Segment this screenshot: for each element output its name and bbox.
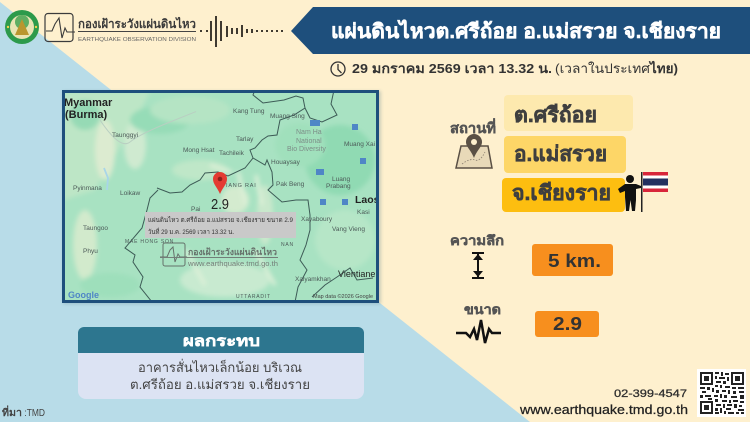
map labels: Pak Beng <box>276 181 305 188</box>
panel: impact: อาคารสั่นไหวเล็กน้อย บริเวณ <box>138 358 302 375</box>
map labels: Kang Tung <box>233 108 265 115</box>
map labels <box>73 108 375 300</box>
date and time: (เวลาในประเทศ <box>555 61 651 76</box>
icon: depth arrow <box>472 253 484 278</box>
map labels: Pai <box>191 206 200 213</box>
panel: impact <box>78 327 364 399</box>
location: province: จ.เชียงราย <box>512 181 611 205</box>
map labels: Phyu <box>83 248 98 255</box>
icon: clock <box>331 62 345 76</box>
depth value <box>532 244 613 276</box>
date and time: 29 มกราคม 2569 เวลา 13.32 น. <box>352 61 552 76</box>
map terrain: (Burma) <box>65 109 108 121</box>
map labels: Tarlay <box>236 136 254 143</box>
map labels: Muang Sing <box>270 113 305 120</box>
map labels: NAN <box>281 242 294 248</box>
map labels: Kasi <box>357 209 370 216</box>
location: subdistrict: ต.ศรีถ้อย <box>514 103 597 127</box>
panel: map <box>62 90 381 304</box>
logo: earthquake observation division: กองเฝ้าระวังแผ่นดินไหว <box>78 16 196 31</box>
icon: seismic wave <box>456 320 501 343</box>
panel: impact: ต.ศรีถ้อย อ.แม่สรวย จ.เชียงราย <box>130 377 310 392</box>
map labels: Taunggyi <box>112 132 138 139</box>
contact website: www.earthquake.tmd.go.th <box>519 402 688 417</box>
QR code <box>697 369 746 417</box>
depth value: 5 km. <box>548 251 601 271</box>
map terrain: Myanmar <box>64 97 113 109</box>
map labels: Pyinmana <box>73 185 102 192</box>
map terrain: Map data ©2026 Google <box>313 293 373 300</box>
location: subdistrict <box>504 95 633 131</box>
logo: earthquake observation division <box>45 14 196 43</box>
map watermark <box>160 243 278 268</box>
map marker: 2.9 <box>211 196 229 213</box>
map terrain: Laos <box>355 194 380 206</box>
title banner <box>291 7 750 54</box>
map labels: MAE HONG SON <box>125 239 174 245</box>
map labels: IANG RAI <box>226 183 257 189</box>
title banner: แผ่นดินไหวต.ศรีถ้อย อ.แม่สรวย จ.เชียงราย <box>331 19 721 43</box>
location: district <box>504 136 626 173</box>
icon: sound wave bars <box>200 16 283 47</box>
map credits: Google <box>68 290 99 300</box>
map labels: UTTARADIT <box>236 294 271 300</box>
map labels: Mong Hsat <box>183 147 215 154</box>
date and time: ไทย) <box>648 60 678 76</box>
map labels: Luang <box>332 176 350 183</box>
map water <box>104 168 108 190</box>
map caption box: วันที่ 29 ม.ค. 2569 เวลา 13.32 น. <box>148 227 234 236</box>
magnitude value <box>535 311 599 337</box>
source note: :TMD <box>22 408 45 419</box>
location label: สถานที่ <box>450 118 496 136</box>
map marker <box>212 172 228 209</box>
map terrain: Vientiane <box>338 269 375 279</box>
location: province <box>502 178 625 212</box>
icon: person with Thai flag <box>618 172 668 212</box>
logo: earthquake observation division: EARTHQUAKE OBSERVATION DIVISION <box>78 37 196 43</box>
icon: map pin <box>456 134 492 168</box>
logo: department seal <box>5 10 39 44</box>
map labels: Xayaboury <box>301 216 333 223</box>
depth label: ความลึก <box>450 233 504 248</box>
map terrain: Bio Diversity <box>287 146 326 153</box>
map labels: Houaysay <box>271 159 301 166</box>
contact phone: 02-399-4547 <box>614 388 687 400</box>
map labels: Xaiyamkhan <box>295 276 331 283</box>
map labels: Tachileik <box>219 150 245 157</box>
magnitude value: 2.9 <box>553 314 582 334</box>
map labels: Loikaw <box>120 190 141 197</box>
magnitude label: ขนาด <box>464 302 501 317</box>
map labels: Vang Vieng <box>332 226 365 233</box>
map borders <box>125 90 373 302</box>
map terrain: National <box>296 138 322 145</box>
map caption box: แผ่นดินไหว ต.ศรีถ้อย อ.แม่สรวย จ.เชียงราย ขนาด 2.9 <box>148 216 293 224</box>
map labels: Prabang <box>326 183 351 190</box>
map watermark: กองเฝ้าระวังแผ่นดินไหว <box>188 246 277 257</box>
map terrain: Nam Ha <box>296 129 322 136</box>
map caption box <box>145 212 296 238</box>
map terrain <box>62 90 380 302</box>
location: district: อ.แม่สรวย <box>514 143 607 166</box>
map labels: Taungoo <box>83 225 108 232</box>
source note: ที่มา <box>2 405 22 419</box>
map labels: Muang Xai <box>344 141 375 148</box>
map watermark: www.earthquake.tmd.go.th <box>187 259 278 268</box>
panel: impact: ผลกระทบ <box>183 333 260 350</box>
